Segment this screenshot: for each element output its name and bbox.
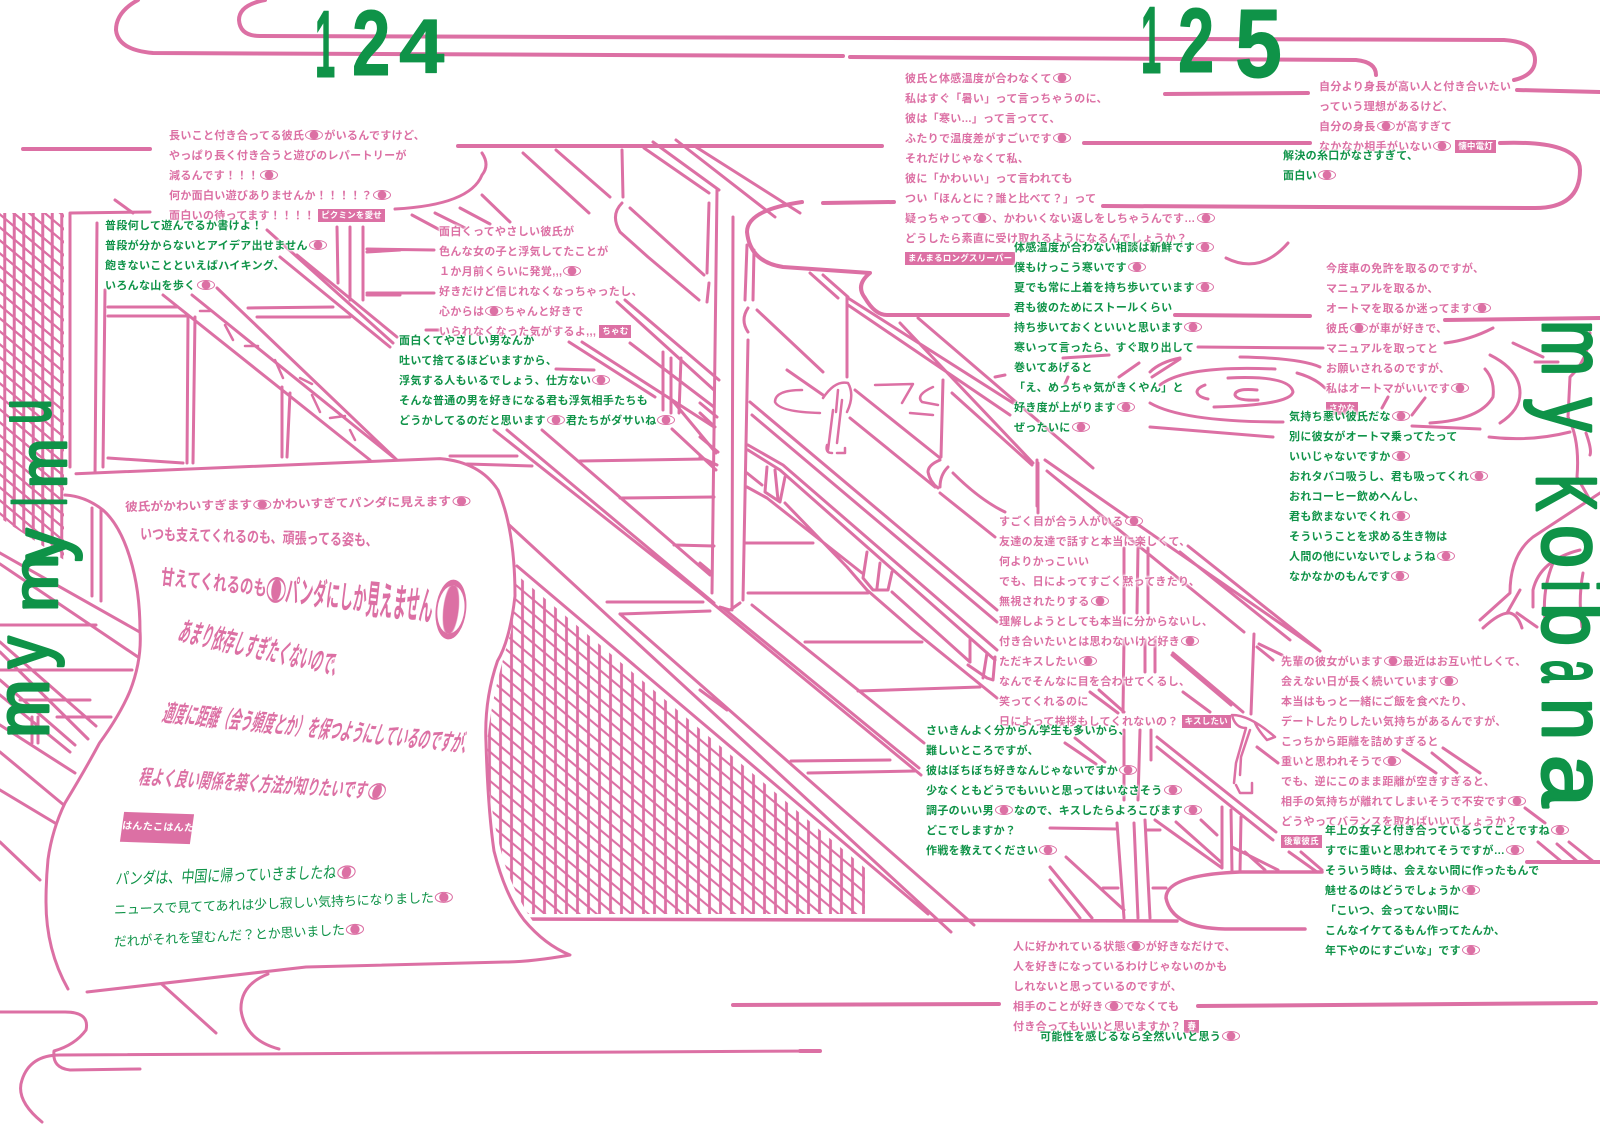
text block: driving licence question [1324,262,1491,415]
text block: being liked question: 人に好かれている状態 が好きなだけで、 [1013,941,1236,953]
text block: reply about hiking: 飽きないことといえばハイキング、 [105,260,285,272]
text block: driving licence reply: おれコーヒー飲めへんし、 [1289,491,1425,503]
scroll text: panda reply: パンダは、中国に帰っていきましたね [115,863,337,888]
text block: senior girlfriend reply: 年上の女子と付き合っているってことですね [1325,825,1550,837]
text block: senior girlfriend question: こっちから距離を詰めすぎると [1281,736,1439,748]
text block: being liked reply: 可能性を感じるなら全然いいと思う [1040,1031,1221,1043]
text block: cheating reply: 浮気する人もいるでしょう、仕方ない [399,375,591,387]
text block: eye contact question: でも、日によってすごく黙ってきたり、 [999,576,1200,588]
text block: cheating boyfriend question: １か月前くらいに発覚,,, [439,266,562,278]
text block: height question: 自分の身長 が高すぎて [1319,121,1452,133]
scroll text: panda reply: ニュースで見ててあれは少し寂しい気持ちになりました [114,890,434,918]
text block: being liked question: 相手のことが好き でなくても [1013,1001,1179,1013]
text block: driving licence question: オートマを取るか迷ってます [1326,303,1472,315]
scroll text: panda question: 見えません [364,577,435,630]
text block: height question: っていう理想があるけど、 [1319,101,1454,113]
text block: cheating boyfriend question: 好きだけど信じれなくなっちゃったし、 [439,286,643,298]
text block: senior girlfriend reply: 「こいつ、会ってない間に [1325,905,1460,917]
scroll panel [46,459,570,992]
text block: cheating boyfriend question: 心からは ちゃんと好きで [439,306,584,318]
text block: eye contact question: 無視されたりする [999,596,1090,608]
text block: eye contact question: ただキスしたい [999,656,1078,668]
text block: driving licence reply: そういうことを求める生き物は [1289,531,1447,543]
text block: eye contact reply: 難しいところですが、 [926,745,1039,757]
left stair details [70,140,800,477]
text block: eye contact reply: 彼はぼちぼち好きなんじゃないですか [926,765,1118,777]
text block: temperature reply: 「え、めっちゃ気がきくやん」と [1014,382,1184,394]
text block: height question: なかなか相手がいない [1319,141,1432,153]
text block: senior girlfriend question: 重いと思われそうで [1281,756,1382,768]
text block: height reply: 面白い [1283,170,1317,182]
scroll text: panda question: 適度に距離（会う頻度とか）を保つようにしているのですが、 [159,699,479,759]
text block: reply about hiking: いろんな山を歩く [105,280,196,292]
text block: reply about hiking: 普段何して遊んでるか書けよ！ [105,220,263,232]
text block: driving licence reply: 別に彼女がオートマ乗ってたって [1289,431,1458,443]
text block: temperature question: 私はすぐ「暑い」って言っちゃうのに、 [905,93,1108,105]
text block: cheating reply: 面白くてやさしい男なんか [399,335,535,347]
text block: driving licence reply: おれタバコ吸うし、君も吸ってくれ [1289,471,1469,483]
scroll text: panda question: パンダにしか [284,573,369,618]
text block: long relationship question: 何か面白い遊びありませんか！！！！？ [169,190,372,202]
text block: eye contact question: キスしたい [1185,716,1228,726]
text block: driving licence question: 今度車の免許を取るのですが、 [1326,263,1484,275]
text block: senior girlfriend question: 相手の気持ちが離れてしまいそうで不安です [1281,796,1507,808]
text block: cheating reply [397,332,675,427]
text block: senior girlfriend reply: そういう時は、会えない間に作ったもんで [1325,865,1540,877]
text block: senior girlfriend reply: 魅せるのはどうでしょうか [1325,885,1461,897]
text block: cheating boyfriend question: 面白くってやさしい彼氏が [439,226,574,238]
top curved lines [23,0,1600,320]
page number 124: 4 [399,3,444,89]
left lower stairs [0,508,145,829]
text block: height reply: 解決の糸口がなさすぎて、 [1283,150,1418,162]
scroll tag [120,812,194,844]
text block: driving licence reply: いいじゃないですか [1289,451,1391,463]
text block: temperature reply: ぜったいに [1014,422,1071,434]
text block: senior girlfriend reply: すでに重いと思われてそうですが… [1325,845,1505,857]
text block: temperature reply: 巻いてあげると [1014,362,1093,374]
text block: height question [1319,80,1511,153]
text block: eye contact question: 理解しようとしても本当に分からないし、 [999,616,1213,628]
text block: temperature question: まんまるロングスリーパー [908,253,1012,263]
text block: cheating boyfriend question: ちゃむ [602,326,628,336]
text block: temperature question [905,72,1215,265]
text block: eye contact question: すごく目が合う人がいる [999,516,1124,528]
text block: long relationship question [169,129,425,222]
name: left vertical label: y [0,528,82,562]
text block: temperature reply: 持ち歩いておくといいと思います [1014,322,1183,334]
text block: driving licence reply: 人間の他にいないでしょうね [1289,551,1436,563]
text block: temperature reply: 夏でも常に上着を持ち歩いています [1014,282,1195,294]
text block: senior girlfriend reply: 年下やのにすごいな」です [1325,945,1461,957]
text block: driving licence question: さかな [1329,403,1355,413]
scroll text: panda reply: だれがそれを望むんだ？とか思いました [114,922,345,950]
scroll text: panda question: あまり依存しすぎたくないので、 [174,616,350,683]
name: left vertical label: m [1,553,71,612]
text block: cheating reply: どうかしてるのだと思います 君たちがダサいね [399,415,656,427]
text block: eye contact reply: さいきんよく分からん学生も多いから、 [926,725,1130,737]
text block: driving licence reply: なかなかのもんです [1289,571,1390,583]
text block: eye contact question: 何よりかっこいい [999,556,1089,568]
text block: being liked question: 春 [1187,1021,1196,1031]
text block: driving licence question: マニュアルを取るか、 [1326,283,1439,295]
scroll text: panda question: 程よく良い関係を築く方法が知りたいです [136,765,371,803]
text block: temperature question: どうしたら素直に受け取れるようになるんでしょうか？ [905,233,1187,245]
text block: eye contact reply: 少なくともどうでもいいと思ってはいなさそう [926,785,1163,797]
name: left vertical label [0,399,82,738]
text block: senior girlfriend reply: こんなイケてるもん作ってたんか、 [1325,925,1505,937]
text block: driving licence reply: 君も飲まないでくれ [1289,511,1391,523]
scroll text: panda question: いつも支えてくれるのも、頑張ってる姿も、 [140,525,378,550]
text block: cheating boyfriend question: 色んな女の子と浮気してたことが [439,246,608,258]
text block: eye contact question: 付き合いたいとは思わないけど好き [999,636,1180,648]
name: left vertical label: m [7,439,81,488]
text block: driving licence reply [1289,408,1488,583]
text block: senior girlfriend reply [1325,822,1569,957]
text block: driving licence question: マニュアルを取ってと [1326,343,1438,355]
text block: temperature reply: 君も彼のためにストールくらい [1014,302,1172,314]
text block: senior girlfriend question: 先輩の彼女がいます 最近はお互い忙しくて、 [1281,656,1527,668]
text block: eye contact reply: どこでしますか？ [926,825,1016,837]
text block: senior girlfriend question: 後輩彼氏 [1284,836,1319,846]
hatched wall under stairs [486,575,865,914]
text block: senior girlfriend question: どうやってバランスを取ればいいでしょうか？ [1281,816,1518,828]
text block: temperature question: 彼氏と体感温度が合わなくて [905,73,1052,85]
scroll text: panda question: 甘えてくれるのも [160,565,268,601]
text block: being liked question: 人を好きになっているわけじゃないのかも [1013,961,1228,973]
text block: temperature reply: 僕もけっこう寒いです [1014,262,1127,274]
central post and handrails [450,190,1093,932]
tree [1480,333,1600,628]
text block: long relationship question: 面白いの待ってます！！！！ [169,210,315,222]
text block: being liked question: 付き合ってもいいと思いますか？ [1013,1021,1181,1033]
text block: height question: 懐中電灯 [1458,141,1493,151]
scroll outline [46,459,570,992]
knot small [775,383,938,453]
wood grain rings [1063,328,1570,439]
bottom lines [0,842,1596,1122]
text block: temperature question: 疑っちゃって 、かわいくない返しをしちゃうんです… [905,213,1196,225]
text block: cheating boyfriend question [437,224,643,338]
page number 124 [315,0,444,98]
text block: long relationship question: 減るんです！！！ [169,170,259,182]
text block: senior girlfriend question: デートしたりしたい気持ちがあるんですが、 [1281,716,1507,728]
text block: eye contact reply: 調子のいい男 なので、キスしたらよろこびます [926,805,1183,817]
text block: temperature reply: 体感温度が合わない相談は新鮮です [1014,242,1195,254]
text block: long relationship question: 長いこと付き合ってる彼氏 がいるんですけど、 [169,130,425,142]
page number 125 [1141,0,1282,98]
text block: long relationship question: やっぱり長く付き合うと遊びのレパートリーが [169,150,407,162]
text block: temperature question: 彼に「かわいい」って言われても [905,173,1073,185]
name: left vertical label: l [0,498,82,506]
text block: reply about hiking [104,217,327,292]
hatched wall left [0,213,64,560]
text block: eye contact question: なんでそんなに目を合わせてくるし、 [999,676,1190,688]
text block: temperature reply [1012,239,1214,434]
text block: eye contact question: 友達の友達で話すと本当に楽しくて、 [999,536,1191,548]
text block: senior girlfriend question [1280,654,1527,848]
text block: senior girlfriend question: 会えない日が長く続いています [1281,676,1439,688]
text block: temperature question: 彼は「寒い...」って言ってて、 [905,113,1061,125]
text block: cheating reply: そんな普通の男を好きになる君も浮気相手たちも [399,395,648,407]
text block: driving licence question: 私はオートマがいいです [1326,383,1450,395]
right side stairs [1037,460,1600,918]
text block: temperature question: ふたりで温度差がすごいです [905,133,1052,145]
text block: height question: 自分より身長が高い人と付き合いたい [1319,81,1511,93]
text block: being liked question: しれないと思っているのですが、 [1013,981,1182,993]
text block: eye contact reply: 作戦を教えてください [926,845,1038,857]
text block: eye contact question: 笑ってくれるのに [999,696,1089,708]
text block: eye contact question: 日によって挨拶もしてくれないの？ [999,716,1179,728]
text block: driving licence question: 彼氏 が車が好きで、 [1326,323,1447,335]
text block: temperature reply: 寒いって言ったら、すぐ取り出して [1014,342,1194,354]
text block: eye contact question [997,514,1231,728]
name: my Koibana [1518,320,1600,808]
text block: being liked question [1013,940,1236,1033]
text block: senior girlfriend question: でも、逆にこのまま距離が空きすぎると、 [1281,776,1495,788]
text block: driving licence reply: 気持ち悪い彼氏だな [1289,411,1391,423]
text block: driving licence question: お願いされるのですが、 [1326,363,1450,375]
text block: cheating boyfriend question: いられなくなった気がするよ,,, [439,326,596,338]
text block: senior girlfriend question: 本当はもっと一緒にご飯を食べたり、 [1281,696,1473,708]
text block: reply about hiking: 普段が分からないとアイデア出せません [105,240,308,252]
scroll text: panda question: 彼氏がかわいすぎます かわいすぎてパンダに見えます [125,494,451,514]
scroll tag: はんたこはんた [121,821,195,834]
text block: temperature question: それだけじゃなくて私、 [905,153,1029,165]
text block: height reply [1283,148,1418,182]
text block: cheating reply: 吐いて捨てるほどいますから、 [399,355,557,367]
text block: long relationship question: ピクミンを愛せ [321,210,382,220]
text block: eye contact reply [926,722,1202,857]
text block: temperature reply: 好き度が上がります [1014,402,1116,414]
text block: temperature question: つい「ほんとに？誰と比べて？」って [905,193,1096,205]
